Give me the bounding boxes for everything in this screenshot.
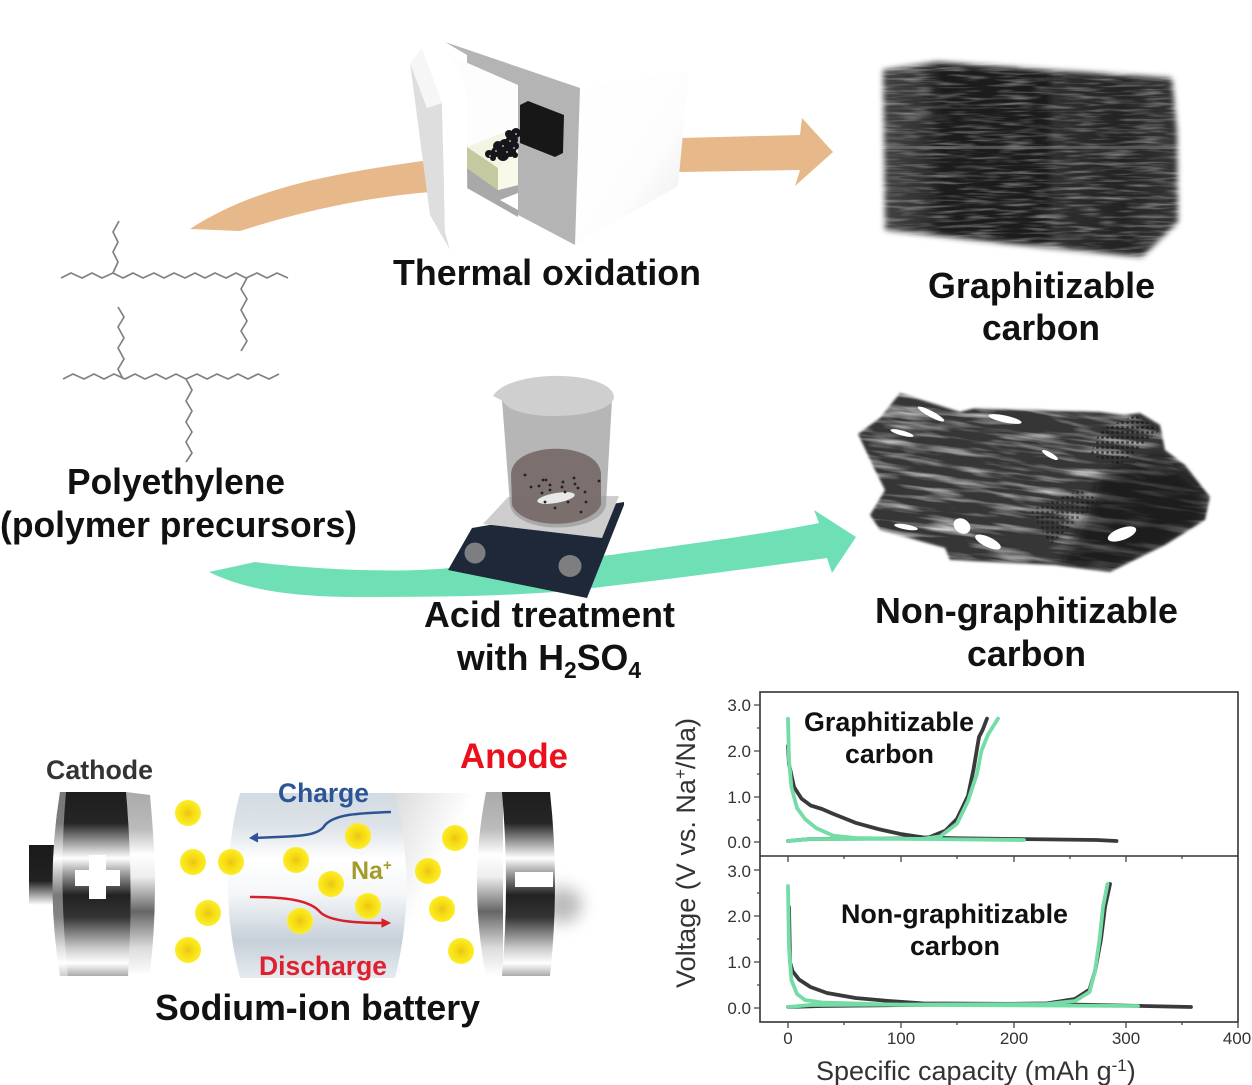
label: sodium ion: + xyxy=(383,857,392,874)
heading: acid treatment: 2 xyxy=(564,657,577,683)
y axis title: Voltage (V vs. Na xyxy=(671,779,701,988)
x tick labels: 200 xyxy=(1000,1029,1028,1048)
sodium ions xyxy=(175,800,474,964)
connector tube xyxy=(395,793,485,976)
heading: polyethylene xyxy=(0,461,357,545)
illustration: non-graphitizable carbon xyxy=(856,392,1212,574)
x tick labels: 0 xyxy=(783,1029,793,1048)
plus sign xyxy=(75,855,120,899)
heading: non-graphitizable carbon xyxy=(875,590,1178,674)
y axis title: + xyxy=(671,769,690,779)
oven chamber opening xyxy=(447,54,518,217)
y tick labels: 1.0 xyxy=(727,953,751,972)
heading: thermal oxidation: Thermal oxidation xyxy=(393,252,701,293)
label: charge: Charge xyxy=(278,778,369,808)
hotplate top xyxy=(483,496,619,538)
chart label: graphitizable carbon: Graphitizable xyxy=(804,707,974,737)
hotplate knobs xyxy=(464,542,582,577)
cathode cylinder xyxy=(52,792,155,976)
y tick labels: 3.0 xyxy=(727,696,751,715)
y axis title: /Na) xyxy=(671,718,701,769)
y tick labels: 1.0 xyxy=(727,788,751,807)
label: sodium ion: Na xyxy=(351,857,383,885)
y tick labels xyxy=(727,696,751,1018)
chart label: non-graphitizable carbon: carbon xyxy=(910,931,1000,961)
icon: oven for thermal oxidation xyxy=(410,33,689,250)
white gaps between sheets xyxy=(890,404,1138,552)
arrow: charge xyxy=(250,812,391,842)
y tick labels: 0.0 xyxy=(727,999,751,1018)
oven door xyxy=(410,33,468,250)
arrow: discharge xyxy=(250,897,390,927)
x tick labels: 300 xyxy=(1112,1029,1140,1048)
y tick labels: 0.0 xyxy=(727,833,751,852)
black powder sample xyxy=(485,128,521,161)
chart frame xyxy=(760,692,1238,1022)
chart label: graphitizable carbon xyxy=(804,707,974,769)
x tick labels: 100 xyxy=(887,1029,915,1048)
molecule: polyethylene chains xyxy=(61,221,288,462)
sample tray xyxy=(467,127,518,217)
heading: graphitizable carbon: carbon xyxy=(982,307,1100,348)
stir bar xyxy=(536,490,576,506)
electrolyte glass cylinder xyxy=(228,793,406,978)
chart label: graphitizable carbon: carbon xyxy=(845,739,934,769)
axis ticks xyxy=(754,705,1238,1028)
heading: non-graphitizable carbon: Non-graphitizable xyxy=(875,590,1178,631)
black heater block xyxy=(520,101,564,157)
heading: acid treatment: Acid treatment xyxy=(424,594,675,635)
x axis title: -1 xyxy=(1112,1056,1127,1075)
disordered mesh region xyxy=(1060,455,1210,572)
beaker liquid xyxy=(511,449,601,524)
hotplate base xyxy=(448,502,624,598)
label: discharge: Discharge xyxy=(259,951,387,981)
x tick labels: 400 xyxy=(1223,1029,1251,1048)
label: anode: Anode xyxy=(460,737,568,776)
curves: graphitizable carbon xyxy=(788,719,1116,841)
x tick labels xyxy=(783,1029,1251,1048)
illustration: graphitizable carbon block xyxy=(875,55,1185,265)
chart: voltage versus specific capacity xyxy=(671,692,1251,1085)
y tick labels: 2.0 xyxy=(727,907,751,926)
beaker body xyxy=(502,400,612,528)
heading: polyethylene: (polymer precursors) xyxy=(0,504,357,545)
heading: acid treatment xyxy=(424,594,675,683)
minus sign xyxy=(515,872,553,887)
label: cathode: Cathode xyxy=(46,755,153,785)
beaker rim xyxy=(493,376,614,416)
curves: non-graphitizable carbon xyxy=(788,884,1191,1007)
heading: non-graphitizable carbon: carbon xyxy=(967,633,1086,674)
chart label: non-graphitizable carbon: Non-graphitizable xyxy=(841,899,1068,929)
icon: stirring hotplate with beaker xyxy=(448,376,624,598)
heading: acid treatment: 4 xyxy=(628,657,641,683)
oven front wall xyxy=(445,42,580,245)
anode shadow xyxy=(542,887,582,923)
y tick labels: 3.0 xyxy=(727,862,751,881)
suspended particles xyxy=(524,474,600,513)
arrow: thermal oxidation route xyxy=(190,118,833,231)
heading: polyethylene: Polyethylene xyxy=(67,461,285,502)
oven outer right face xyxy=(575,70,689,245)
anode cylinder xyxy=(477,792,555,976)
y tick labels: 2.0 xyxy=(727,742,751,761)
cathode terminal xyxy=(29,845,59,905)
diagram: sodium-ion battery xyxy=(29,737,582,981)
heading: graphitizable carbon: Graphitizable xyxy=(928,265,1155,306)
heading: sodium-ion battery: Sodium-ion battery xyxy=(155,987,480,1028)
heading: acid treatment: SO xyxy=(577,637,628,678)
chart label: non-graphitizable carbon xyxy=(841,899,1068,961)
heading: graphitizable carbon xyxy=(928,265,1155,348)
heading: acid treatment: with H xyxy=(457,637,565,678)
arrow: acid treatment route xyxy=(209,510,856,597)
